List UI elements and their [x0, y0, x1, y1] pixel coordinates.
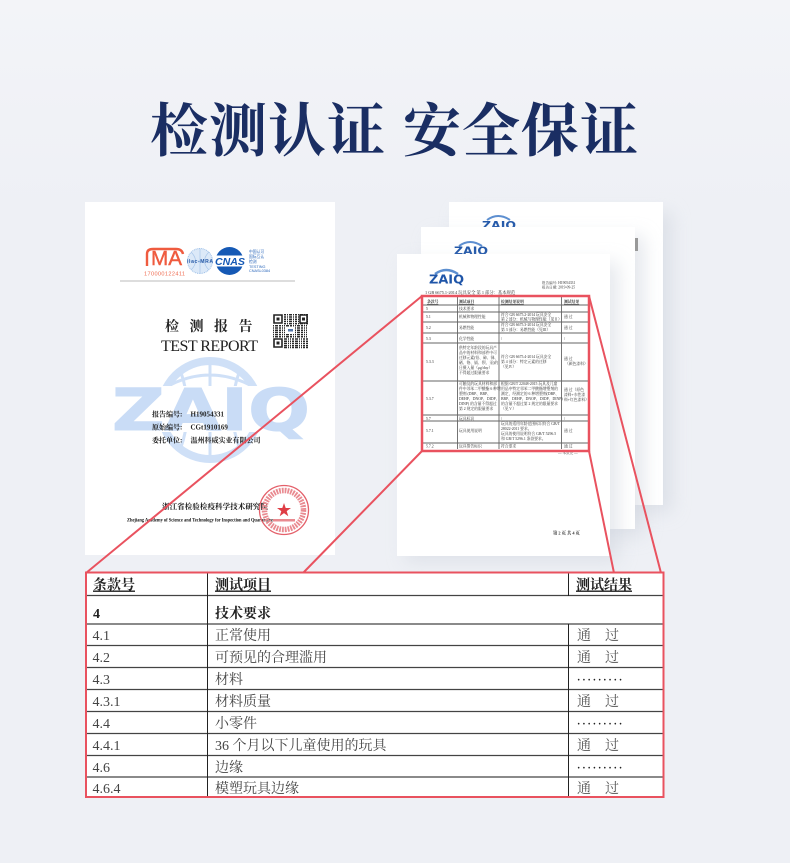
mini test table: （见Ⅳ）	[501, 364, 516, 369]
result column: 过	[605, 650, 619, 666]
clause rows: 4.6	[92, 761, 110, 776]
result column: 通	[577, 629, 591, 644]
panel: enlarged test result table	[86, 572, 664, 797]
mini test table: 日摄入量（μg/day）	[459, 365, 492, 370]
mini test table: 技术要求	[459, 306, 474, 311]
mini test table: 化学性能	[459, 336, 474, 341]
mini test table: /	[564, 337, 566, 341]
mini test table: 迁移元素(铅、砷、锑、	[459, 355, 498, 360]
mini test table: 符合 GB 6675.4-2014 玩具安全	[501, 354, 551, 359]
report number	[542, 280, 575, 290]
clause rows: 小零件	[215, 716, 257, 732]
result column	[577, 628, 624, 797]
report heading	[161, 318, 263, 355]
mini test table: 塑剂 (DBP、BBP、	[459, 391, 491, 396]
mini test table: DINP) 的含量不得超过	[459, 401, 497, 406]
mini test table: 品中的材料和部件中可	[459, 350, 497, 355]
mini test table: 通 过	[564, 444, 573, 448]
mini test table: 漆料+水性漆	[564, 392, 585, 397]
accreditation text: TESTING	[249, 265, 266, 269]
mini test table: 用品中特定邻苯二甲酸酯增塑剂的	[501, 386, 558, 391]
mini test table: 可触及的玩具材料和部	[459, 381, 497, 386]
icon: red seal	[260, 486, 308, 534]
result column: ·········	[577, 763, 624, 774]
clause rows: 4.4	[92, 717, 110, 732]
result column: ·········	[577, 719, 624, 730]
icon: CMA logo: MA	[151, 248, 183, 270]
report fields: CGt1910169	[190, 424, 228, 432]
icon: QR code	[273, 314, 308, 348]
panel: middle report page	[421, 227, 644, 536]
clause rows: 4.2	[92, 651, 110, 666]
row: section heading	[93, 605, 271, 622]
clause rows: 材料质量	[215, 693, 271, 710]
title: 安全保证	[403, 99, 639, 164]
panel: test report cover	[85, 202, 335, 555]
report number: 报告日期: 2019-09-25	[542, 284, 575, 290]
mini test table: 通 过	[564, 428, 573, 433]
mini test table: DEHP、DNOP、DIDP、	[459, 397, 500, 401]
clause rows: 36 个月以下儿童使用的玩具	[215, 737, 387, 754]
result column: 过	[605, 694, 619, 710]
mini test table: 料+红色漆料）	[564, 397, 589, 402]
mini test table: 通 过	[564, 356, 573, 361]
panel: back report page	[449, 202, 672, 512]
mini test table: 5.7	[426, 417, 431, 421]
mini test table: 第 4 部分：特定元素的迁移	[501, 359, 547, 364]
institute name: Zhejiang Academy of Science and Technology for Inspection and Quarantine	[127, 518, 273, 524]
mini test table: 符合要求	[501, 444, 516, 448]
mini test table: 5.3.3	[426, 360, 434, 364]
mini test table: 机械和物理性能	[459, 314, 486, 319]
accreditation text: 检测	[249, 259, 257, 264]
result column: 过	[605, 781, 619, 797]
row: section heading: 技术要求	[215, 605, 271, 622]
clause rows: 正常使用	[215, 627, 271, 644]
clause rows: 可预见的合理滥用	[215, 649, 327, 666]
mini test table: 5.3.7	[426, 397, 434, 401]
report heading: TEST REPORT	[161, 338, 258, 355]
mini test table: 第 2 规定的限量要求	[459, 406, 493, 411]
accreditation text: 国际互认	[249, 254, 264, 259]
table header	[93, 576, 632, 594]
result column: 通	[577, 739, 591, 754]
clause rows: 4.3.1	[92, 695, 120, 710]
clause rows: 4.6.4	[92, 782, 120, 797]
report fields: 原始编号:	[152, 422, 182, 432]
clause rows: 边缘	[215, 760, 243, 776]
clause rows: 材料	[215, 671, 243, 688]
result column: 通	[577, 782, 591, 797]
end of page note: — 本页完 —	[557, 450, 578, 455]
mini test table: 易燃性能	[459, 325, 474, 330]
report heading: 检测报告	[165, 318, 263, 335]
mini test table: 条款号	[427, 299, 439, 304]
report fields	[152, 410, 260, 444]
mini test table: 不得超过限量要求	[459, 370, 490, 375]
mini test table: 玩具警告标识	[459, 444, 482, 448]
report fields: 报告编号:	[152, 410, 182, 418]
mini test table: 通 过	[564, 325, 573, 330]
table header: 条款号	[93, 576, 135, 594]
report fields: 温州科威实业有限公司	[190, 436, 260, 444]
report number: 报告编号: H19054331	[542, 280, 575, 285]
clause rows: 4.4.1	[92, 739, 120, 754]
mini test table: 5.2	[426, 326, 431, 330]
mini test table: （颜色漆料）	[565, 361, 588, 366]
mini test table: 的含量不超过第 2 规定的限量要求	[501, 401, 558, 406]
logo: ZAIQ back page: ZAIQ	[482, 219, 516, 232]
result column: 通	[577, 695, 591, 710]
mini test table: 第 3 部分：易燃性能（见Ⅲ）	[501, 327, 550, 332]
mini test table: /	[564, 417, 566, 421]
clause rows: 4.1	[92, 629, 110, 644]
mini test table: 28022-2011 要求。	[501, 426, 532, 431]
mini test table: 符合 GB 6675.3-2014 玩具安全	[501, 322, 551, 327]
mini test table: 玩具的使用说明符合 GB/T 5296.5	[501, 431, 556, 436]
icon: CMA logo: 170000122411	[144, 272, 185, 278]
clause rows: 4.3	[92, 673, 110, 688]
mini test table: （见Ⅴ）	[501, 406, 516, 411]
result column: ·········	[577, 675, 624, 686]
watermark: ZAIQ globe	[112, 361, 310, 460]
clause rows: 模塑玩具边缘	[215, 780, 299, 797]
mini test table: 和 GB/T 5296.1 条款要求。	[501, 436, 546, 441]
mini test table	[423, 297, 589, 449]
mini test table: 符合 GB 6675.2-2014 玩具安全	[501, 312, 551, 317]
logo: ZAIQ middle page: ZAIQ	[454, 244, 488, 258]
result column: 通	[577, 651, 591, 666]
title: 检测认证	[150, 99, 386, 164]
accreditation text	[249, 249, 270, 273]
mini test table: 玩具标识	[459, 416, 474, 421]
result column: 过	[605, 738, 619, 754]
mini test table: 供特定年龄段的玩具产	[459, 345, 497, 350]
report fields: H19054331	[190, 410, 224, 418]
logo: ZAIQ front page: ZAIQ	[429, 272, 464, 286]
institute name: 浙江省检验检疫科学技术研究院	[162, 501, 268, 511]
mini test table: /	[501, 417, 503, 421]
row: section heading: 4	[93, 607, 100, 622]
result column: 过	[605, 628, 619, 644]
report fields: 委托单位:	[152, 436, 182, 444]
page number: 第 2 页 共 4 页	[553, 530, 581, 536]
accreditation text: CNASL0384	[249, 269, 270, 273]
mini test table: 根据 GB/T 22048-2015 玩具及儿童	[501, 381, 558, 386]
table header: 测试项目	[215, 576, 271, 594]
clause heading: 1 GB 6675.1-2014 玩具安全 第 1 部分：基本规范	[425, 289, 516, 296]
icon: ilac-MRA logo	[187, 248, 213, 274]
mini test table: 第 2 部分：机械与物理性能（见Ⅱ）	[501, 316, 562, 322]
mini test table: /	[501, 337, 503, 341]
mini test table: 测定，经测定的 6 种增塑剂(DBP、	[501, 391, 559, 396]
icon: CNAS logo: CNAS	[215, 256, 245, 268]
icon: CMA logo	[144, 248, 185, 278]
mini test table: 5.3	[426, 337, 431, 341]
mini test table: 硒、铬、镉、钡、汞)的	[459, 360, 498, 365]
icon: CNAS logo	[214, 247, 246, 275]
clause rows	[92, 627, 387, 797]
mini test table: 通 过（原色	[564, 387, 584, 392]
mini test table: 件中邻苯二甲酸酯 6 种增	[459, 386, 501, 391]
watermark: ZAIQ globe: ZAIQ	[112, 376, 310, 444]
mini test table: 玩具使用说明	[459, 428, 482, 433]
accreditation text: 中国认可	[249, 249, 264, 254]
mini test table: 5.1	[426, 315, 431, 319]
mini test table: 检测结果说明	[501, 299, 524, 304]
mini test table: 测试结果	[564, 299, 579, 304]
table red border	[86, 572, 664, 797]
mini test table: 5.7.1	[426, 429, 434, 433]
mini test table: 通 过	[564, 314, 573, 319]
mini test table: 5.7.2	[426, 444, 434, 448]
mini test table: 玩具的适用年龄范围标识符合 GB/T	[501, 421, 561, 426]
highlight box on report page	[422, 296, 589, 451]
mini test table: 测试项目	[459, 299, 474, 304]
table grid	[87, 573, 663, 797]
mini test table: 5	[426, 307, 428, 311]
panel: front report page	[397, 254, 619, 562]
institute name	[127, 501, 273, 524]
table header: 测试结果	[576, 576, 632, 594]
mini test table: BBP、DEHP、DNOP、DIDP、DINP)	[501, 397, 563, 401]
callout: zoom lines	[86, 296, 661, 573]
icon: ilac-MRA logo: ilac-MRA	[187, 259, 213, 265]
